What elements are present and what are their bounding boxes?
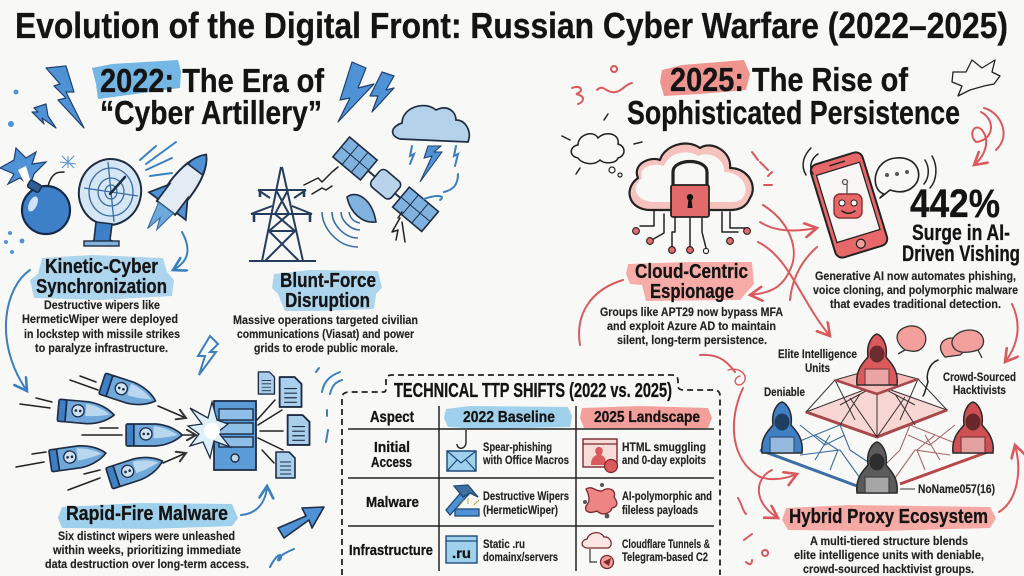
body text: blunt-force: Massive operations targeted civilian <box>233 313 418 327</box>
figure: elite hacker <box>857 334 897 385</box>
section: cloud-centric espionage: Cloud-Centric <box>635 261 748 283</box>
icon: .ru browser window <box>446 536 477 563</box>
section: blunt-force disruption <box>233 270 418 355</box>
body text: blunt-force <box>233 313 418 355</box>
heading: 2022 era <box>92 60 325 131</box>
figure: deniable hacker <box>762 402 802 453</box>
icon: flying documents <box>257 372 310 478</box>
row: initial access: Initial <box>374 439 410 456</box>
row: initial access: with Office Macros <box>482 453 569 467</box>
bottom tier platform <box>760 415 993 493</box>
icon: browser with 0-day badge <box>583 439 618 472</box>
body text: blunt-force: communications (Viasat) and power <box>237 327 414 341</box>
dashed frame <box>342 375 720 575</box>
icon: lightning outline <box>198 336 218 375</box>
body text: hybrid proxy: crowd-sourced hacktivist groups. <box>803 562 974 576</box>
body text: hybrid proxy: elite intelligence units with deniable, <box>794 548 984 562</box>
table header <box>370 406 712 429</box>
icon: signal arcs <box>322 212 360 247</box>
decorative red marks <box>738 498 768 564</box>
panel: 2025 era <box>562 60 1020 576</box>
row: initial access: Spear-phishing <box>483 440 552 454</box>
body text: cloud-centric: Groups like APT29 now bypass MFA <box>600 305 783 319</box>
table header: Aspect <box>370 409 415 426</box>
body text: hybrid proxy <box>794 534 984 576</box>
diagram: hybrid proxy ecosystem <box>760 326 1016 496</box>
decorative dots <box>4 90 24 254</box>
section: kinetic-cyber synchronization <box>22 255 180 355</box>
panel: 2022 era <box>0 60 469 571</box>
body text: rapid-fire: within weeks, prioritizing immediate <box>52 543 241 557</box>
icon: rocket <box>131 141 225 244</box>
icon: thought cloud <box>562 114 642 177</box>
body text: cloud-centric: silent, long-term persistence. <box>617 333 767 347</box>
icon: speech bubble with dots <box>875 156 936 198</box>
icon: phone with AI robot <box>803 148 889 259</box>
body text: rapid-fire: Six distinct wipers were unleashed <box>58 529 235 543</box>
icon: exploding server <box>188 401 256 470</box>
body text: vishing <box>813 269 1018 311</box>
body text: blunt-force: grids to erode public morale. <box>254 341 398 355</box>
row: malware <box>366 483 712 518</box>
arrow: kinetic to rapid-fire <box>6 270 30 391</box>
row: malware: fileless payloads <box>622 503 698 517</box>
stat: 442% surge in AI-driven vishing <box>813 182 1020 311</box>
labels: network tiers: Deniable <box>764 385 805 399</box>
labels: network tiers: Units <box>805 361 830 375</box>
section: cloud-centric espionage: Espionage <box>650 281 734 303</box>
body text: cloud-centric <box>600 305 783 347</box>
body text: rapid-fire: data destruction over long-term access. <box>45 557 249 571</box>
body text: hybrid proxy: A multi-tiered structure blends <box>810 534 968 548</box>
row: initial access: Access <box>371 454 412 471</box>
labels: network tiers <box>764 347 1016 496</box>
decorative scribbles top-left <box>572 66 632 104</box>
icon: polymorphic blob <box>583 483 617 518</box>
body text: kinetic-cyber: Destructive wipers like <box>44 298 160 312</box>
arrows: ecosystem flows <box>579 280 1018 518</box>
section: rapid-fire malware: Rapid-Fire Malware <box>66 503 228 525</box>
icon: lightning bolts centre <box>338 62 394 122</box>
body text: kinetic-cyber: HermeticWiper were deployed <box>22 312 178 326</box>
icon: signal dashes <box>140 142 176 176</box>
figure: hacktivist <box>953 402 993 453</box>
icon: sparks from tower <box>304 167 338 194</box>
row: malware: Malware <box>366 494 419 511</box>
row: initial access: HTML smuggling <box>622 440 706 454</box>
row: malware: (HermeticWiper) <box>483 503 558 517</box>
body text: kinetic-cyber: in lockstep with missile strikes <box>24 327 180 341</box>
icon: .ru browser window: .ru <box>452 545 471 561</box>
section: hybrid proxy ecosystem label: Hybrid Proxy Ecosystem <box>789 506 988 528</box>
stat: 442% surge in AI-driven vishing: 442% <box>910 182 1000 226</box>
heading: 2022 era: 2022: The Era of <box>100 62 325 99</box>
labels: network tiers: NoName057(16) <box>918 482 995 496</box>
section: blunt-force disruption: Disruption <box>285 290 370 312</box>
section: kinetic-cyber synchronization: Kinetic-Cyber <box>45 256 158 278</box>
arrows: bullets to server <box>158 406 196 463</box>
row: infrastructure: Cloudflare Tunnels & <box>622 537 710 551</box>
icon: starburst outline <box>952 60 1000 96</box>
labels: network tiers: Hacktivists <box>953 383 1006 397</box>
icon: 3D blue arrow <box>278 507 324 538</box>
table grid <box>348 406 714 571</box>
arrow: rapid-fire to documents <box>241 486 267 515</box>
row: infrastructure <box>349 533 710 568</box>
body text: cloud-centric: and exploit Azure AD to maintain <box>607 319 776 333</box>
section: kinetic-cyber synchronization: Synchronization <box>36 276 167 298</box>
row: malware: AI-polymorphic and <box>622 489 712 503</box>
section: rapid-fire malware <box>45 503 249 571</box>
row: initial access <box>371 430 706 472</box>
arrow: rocket to label <box>173 232 188 270</box>
section: cloud-centric espionage <box>600 261 783 347</box>
arrows: cloud to phone and others <box>750 205 830 336</box>
row: infrastructure: Static .ru <box>483 537 525 551</box>
icon: transmission tower <box>249 167 316 261</box>
body text: kinetic-cyber: to paralyze infrastructure. <box>35 341 168 355</box>
arrow: vishing to hacktivists <box>1005 304 1018 362</box>
labels: network tiers: Elite Intelligence <box>778 347 857 361</box>
heading: 2025 era: 2025: The Rise of <box>670 61 909 98</box>
section: blunt-force disruption: Blunt-Force <box>280 270 376 292</box>
table header: 2025 Landscape <box>594 409 700 426</box>
table title: TECHNICAL TTP SHIFTS (2022 vs. 2025) <box>394 380 672 402</box>
body text: rapid-fire <box>45 529 249 571</box>
heading: 2022 era: “Cyber Artillery” <box>100 94 322 131</box>
panel: technical TTP shifts table <box>342 375 720 575</box>
row: infrastructure: Infrastructure <box>349 542 433 559</box>
table header: 2022 Baseline <box>463 409 555 426</box>
icon: cloud with padlock and circuits <box>629 144 772 254</box>
icon: hammer on disk <box>446 485 479 516</box>
row: malware: Destructive Wipers <box>483 489 569 503</box>
icon: radar dish <box>72 152 148 246</box>
icon: lightning bolts left <box>32 66 84 128</box>
section: hybrid proxy ecosystem label <box>782 505 996 576</box>
icon: signal arcs near table <box>316 368 342 442</box>
middle tier platform <box>806 379 947 437</box>
heading: 2025 era <box>627 60 960 131</box>
decorative squiggle <box>270 549 294 567</box>
row: infrastructure: Telegram-based C2 <box>622 550 708 564</box>
body text: vishing: that evades traditional detection. <box>830 297 1001 311</box>
row: infrastructure: domainx/servers <box>483 550 558 564</box>
icon: five skull bullets <box>16 373 182 490</box>
figure: NoName057(16) hacker <box>857 442 897 493</box>
icon: storm cloud <box>393 106 469 200</box>
top tier platform <box>835 368 918 394</box>
body text: kinetic-cyber <box>22 298 180 355</box>
icon: bomb with explosion <box>0 148 76 234</box>
row: initial access: and 0-day exploits <box>622 453 706 467</box>
icon: cloud to telegram <box>582 533 614 568</box>
icon: speech bubbles <box>897 326 984 396</box>
icon: phishing envelope <box>447 430 476 471</box>
decorative swirl with arrow <box>972 108 1004 165</box>
icon: satellite <box>333 137 438 242</box>
